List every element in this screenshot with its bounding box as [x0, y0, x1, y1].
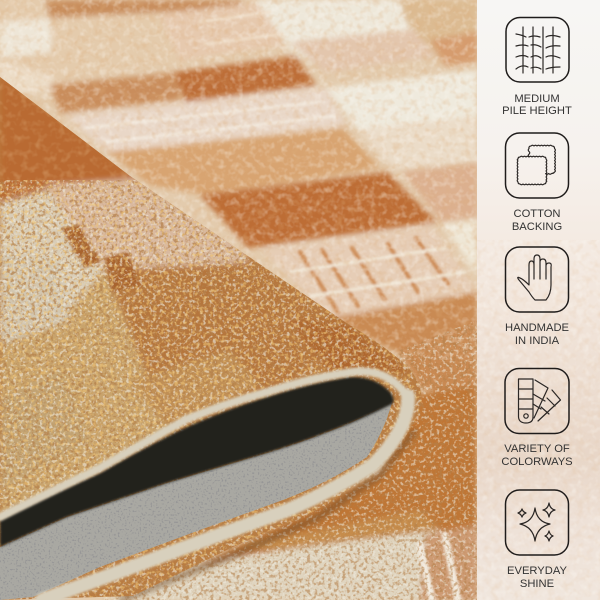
upper white rim	[0, 371, 404, 517]
yarn speckle	[0, 180, 430, 600]
rug photo background	[0, 0, 477, 600]
grey backing	[0, 402, 392, 600]
folded rug top face	[0, 60, 430, 600]
label: BACKING	[512, 221, 562, 233]
feature: everyday shine	[506, 490, 568, 590]
label: COTTON	[513, 208, 561, 220]
in-focus floor yarn	[102, 321, 477, 600]
backing weave speckle	[0, 400, 400, 600]
floor mottling	[0, 0, 477, 360]
icon: sparkles	[506, 490, 568, 555]
brown yarn blocks	[62, 225, 140, 292]
lower white rim	[42, 396, 408, 600]
label: PILE HEIGHT	[502, 105, 572, 117]
dark shadow	[0, 377, 394, 547]
icon: hand	[506, 247, 568, 312]
side panel	[477, 0, 600, 600]
label: IN INDIA	[515, 335, 560, 347]
fold inside	[0, 371, 408, 600]
label: HANDMADE	[505, 322, 569, 334]
feature: handmade in india	[505, 247, 569, 347]
label: COLORWAYS	[501, 456, 573, 468]
icon: fabric swatches	[506, 133, 568, 198]
label: SHINE	[520, 578, 554, 590]
icon: colour fan deck	[505, 368, 569, 434]
feature: variety of colorways	[501, 368, 573, 468]
floor rug checks	[0, 0, 477, 600]
label: EVERYDAY	[507, 565, 567, 577]
label: VARIETY OF	[504, 443, 570, 455]
feature: cotton backing	[506, 133, 568, 233]
shadow below fold	[120, 430, 415, 600]
stripes on floor rug	[85, 12, 465, 600]
feature: medium pile height	[502, 18, 572, 117]
icon: pile weave	[506, 18, 569, 82]
label: MEDIUM	[514, 93, 560, 105]
